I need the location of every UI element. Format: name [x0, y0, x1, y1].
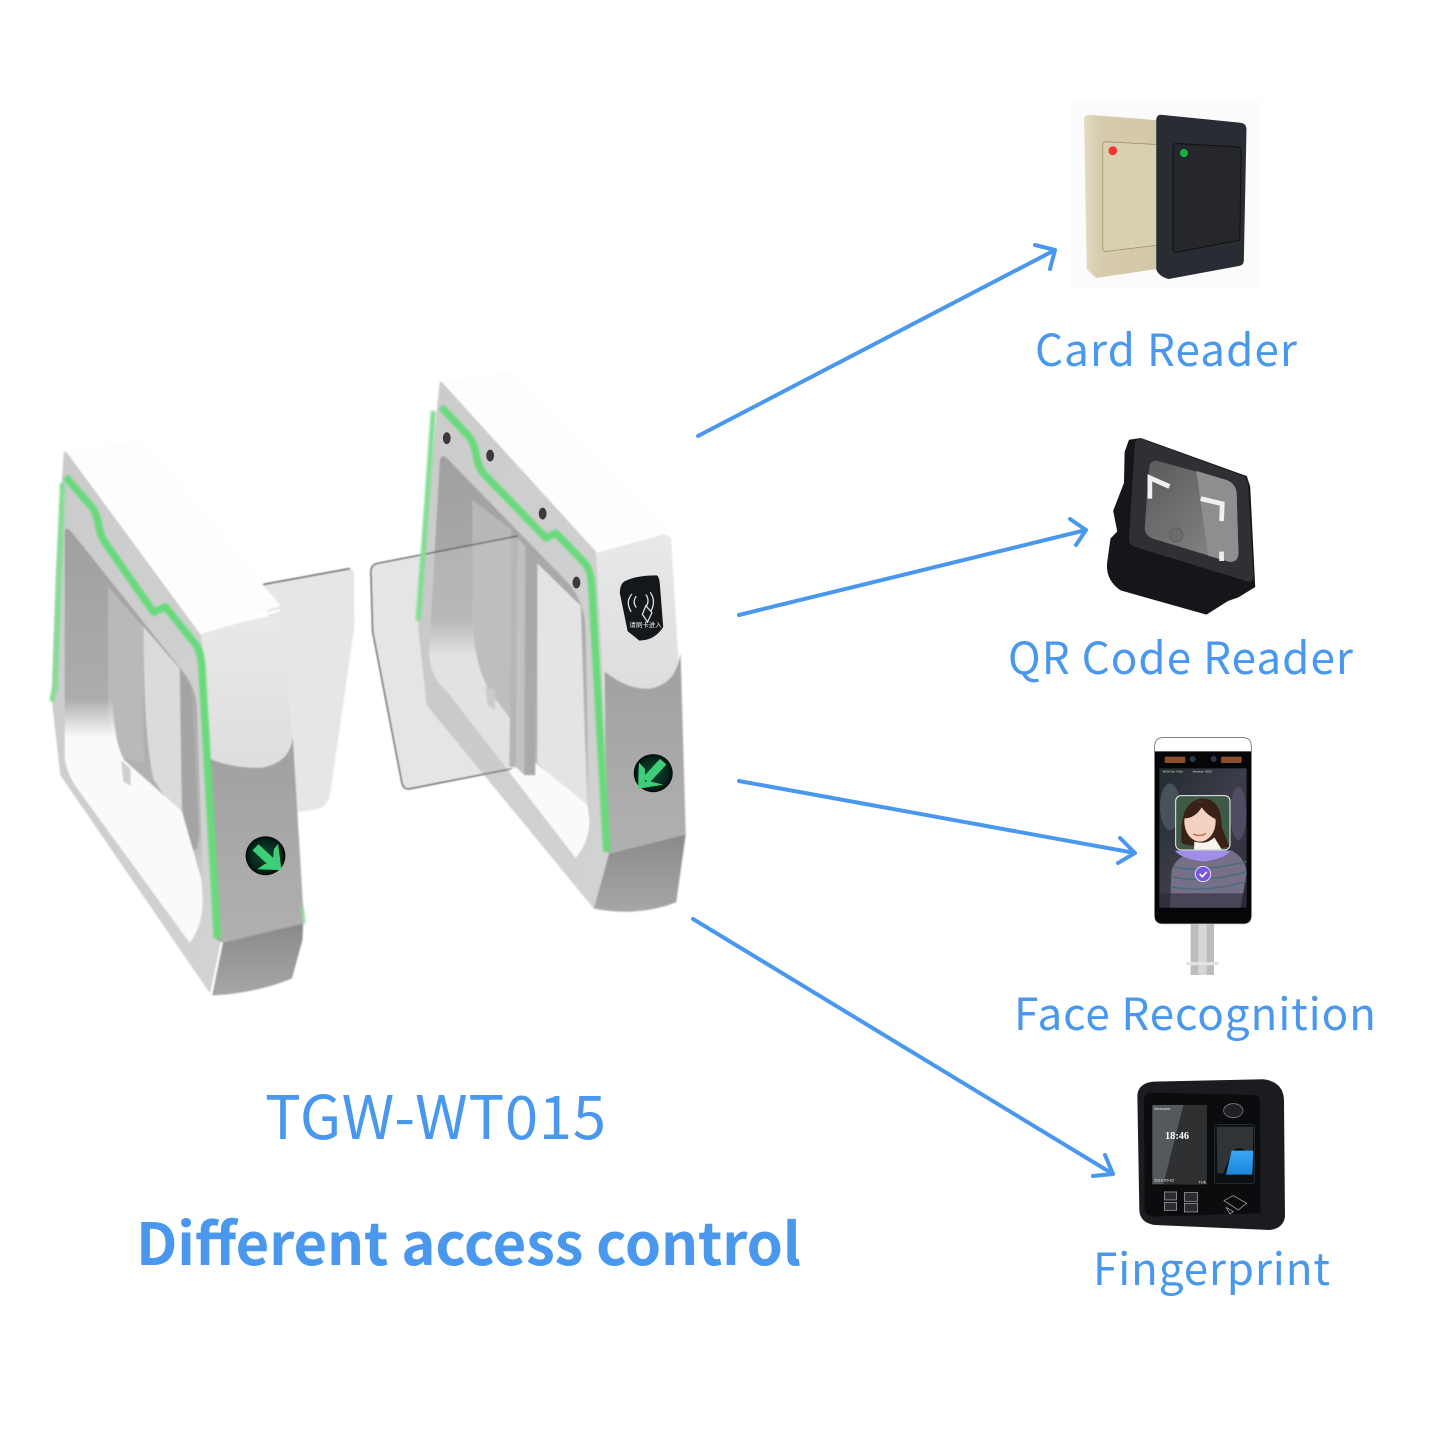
arrow: face recognition [739, 781, 1135, 863]
right column [596, 534, 686, 854]
arrow: fingerprint [693, 919, 1113, 1176]
fingerprint LCD: Welcome [1154, 1106, 1171, 1111]
right green light strip [418, 407, 607, 851]
left glass wing [260, 569, 354, 813]
right frame [418, 381, 609, 909]
fingerprint LCD [1152, 1105, 1207, 1185]
left direction arrow [246, 836, 285, 875]
headline: Different access control [136, 1198, 801, 1282]
left column [201, 615, 304, 943]
arrows to access control devices [693, 245, 1135, 1176]
right gate [371, 371, 686, 912]
fingerprint terminal image [1137, 1079, 1285, 1230]
portrait [1181, 798, 1229, 849]
label: QR Code Reader: QR Code Reader [1008, 623, 1354, 687]
arrow: QR code reader [739, 519, 1086, 615]
fingerprint scanner [1214, 1104, 1254, 1183]
left top cover [67, 441, 281, 631]
face recognition terminal image [1154, 737, 1252, 975]
card reader image [1071, 101, 1259, 289]
RFID card tap panel [620, 575, 663, 641]
illustration: swing barrier turnstile gates [52, 371, 686, 995]
black reader [1156, 115, 1246, 279]
right foot [594, 835, 686, 912]
sensor dots [443, 432, 580, 589]
pole [1186, 922, 1219, 975]
right direction arrow [634, 754, 673, 792]
screen: MUM:Ver 14Qn [1163, 770, 1184, 774]
left green light strip [52, 477, 304, 938]
fingerprint LCD: TUE [1198, 1180, 1207, 1185]
label: Face Recognition: Face Recognition [1014, 979, 1376, 1043]
screen [1159, 768, 1247, 908]
QR scan window [1145, 460, 1238, 562]
fingerprint LCD: 2016-05-02 [1154, 1177, 1175, 1182]
right window [429, 456, 589, 858]
arrow: card reader [698, 245, 1055, 436]
RFID card tap panel: 请刷卡进入 [629, 620, 662, 629]
card symbol [1224, 1196, 1247, 1214]
keypad [1164, 1192, 1198, 1212]
left gate [52, 441, 354, 995]
left frame [52, 451, 221, 993]
fingerprint LCD: 18:46 [1165, 1131, 1189, 1142]
model name: TGW-WT015 [265, 1070, 606, 1157]
left foot [212, 923, 303, 995]
right post and glass wing [509, 538, 537, 775]
beige reader [1084, 115, 1159, 278]
left window [65, 528, 203, 943]
label: Card Reader: Card Reader [1035, 315, 1298, 379]
right top cover [442, 371, 671, 551]
QR code reader image [1107, 438, 1255, 615]
label: Fingerprint: Fingerprint [1093, 1234, 1330, 1298]
screen: Member: 0023 [1193, 770, 1212, 774]
